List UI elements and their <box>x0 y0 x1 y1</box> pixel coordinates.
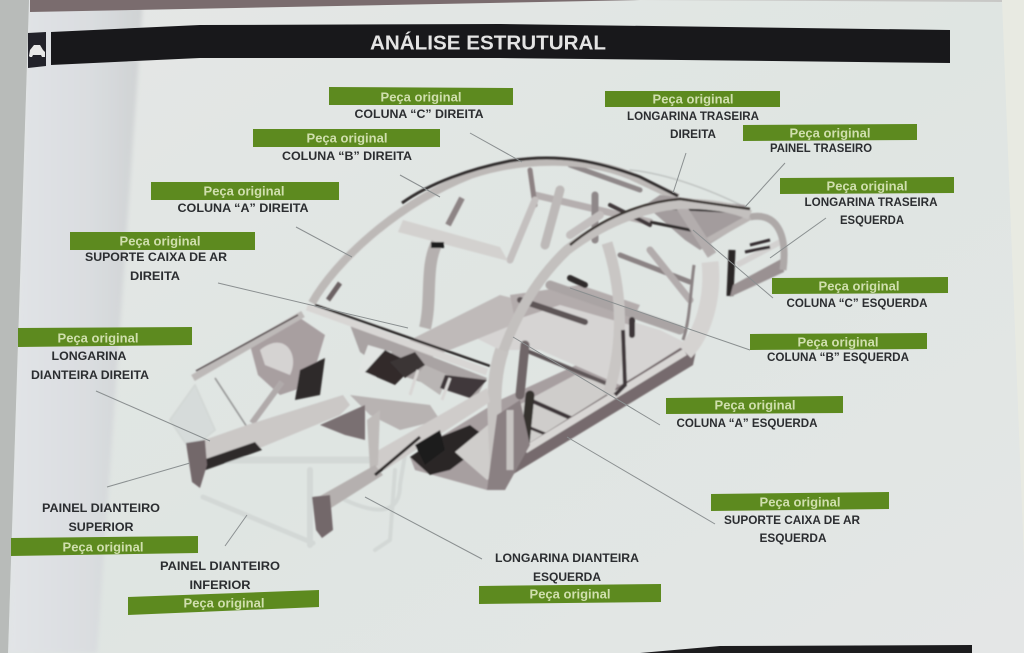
label: suporte caixa de ar direita: SUPORTE CAIXA DE AR <box>85 250 227 264</box>
label: coluna C esquerda: Peça original <box>819 278 899 293</box>
label: longarina dianteira direita <box>18 327 192 382</box>
label: coluna B direita <box>253 129 440 163</box>
label: coluna C esquerda <box>772 277 948 310</box>
label: longarina dianteira esquerda: LONGARINA DIANTEIRA <box>495 551 639 565</box>
label: suporte caixa de ar esquerda: ESQUERDA <box>760 531 827 545</box>
label: longarina traseira direita: Peça original <box>653 91 733 106</box>
label: longarina dianteira direita: LONGARINA <box>52 349 127 363</box>
far roof rail and A pillar <box>312 162 678 303</box>
header icon: car <box>28 32 46 68</box>
label: suporte caixa de ar esquerda <box>711 492 889 545</box>
near roof arc and A pillar <box>493 204 750 383</box>
label: suporte caixa de ar esquerda: Peça original <box>760 494 840 509</box>
label: coluna C direita: Peça original <box>381 89 461 104</box>
label: longarina traseira direita: DIREITA <box>670 127 716 141</box>
title bar: ANÁLISE ESTRUTURAL <box>370 31 606 54</box>
leader lines <box>96 133 826 559</box>
label: longarina dianteira esquerda: ESQUERDA <box>533 570 601 584</box>
right front longeron <box>190 395 350 468</box>
label: coluna A esquerda <box>666 396 843 430</box>
label: coluna C direita: COLUNA “C” DIREITA <box>354 107 484 121</box>
label: painel dianteiro inferior: INFERIOR <box>190 578 251 592</box>
near trunk and rear <box>645 195 752 250</box>
far strut tower <box>250 318 325 395</box>
label: painel dianteiro superior <box>11 501 198 556</box>
ghost front parts <box>170 170 747 550</box>
label: painel dianteiro superior: PAINEL DIANTEIRO <box>42 501 160 515</box>
label: painel dianteiro inferior: PAINEL DIANTEIRO <box>160 559 280 573</box>
label: suporte caixa de ar direita: DIREITA <box>130 269 180 283</box>
sill <box>487 346 697 490</box>
label: painel dianteiro inferior: Peça original <box>184 595 264 610</box>
title bar <box>51 24 950 65</box>
label: coluna B esquerda: Peça original <box>798 334 878 349</box>
label: longarina traseira esquerda: LONGARINA TRASEIRA <box>804 195 938 209</box>
label: longarina traseira direita: LONGARINA TRASEIRA <box>627 109 759 123</box>
label: coluna B esquerda <box>750 333 927 364</box>
label: coluna C direita <box>329 87 513 121</box>
label: coluna A esquerda: Peça original <box>715 397 795 412</box>
label: coluna B esquerda: COLUNA “B” ESQUERDA <box>767 350 909 364</box>
cowl and front bay <box>350 325 487 400</box>
label: longarina dianteira esquerda <box>479 551 661 604</box>
label: coluna A direita <box>151 182 339 215</box>
label: painel dianteiro inferior <box>128 559 319 615</box>
label: painel dianteiro superior: SUPERIOR <box>68 520 134 534</box>
label: longarina dianteira direita: Peça original <box>58 330 138 345</box>
label: longarina dianteira esquerda: Peça original <box>530 586 610 601</box>
label: suporte caixa de ar direita <box>70 232 255 283</box>
label: longarina traseira esquerda: ESQUERDA <box>840 213 904 227</box>
label: painel traseiro: PAINEL TRASEIRO <box>770 141 872 155</box>
near front apron and left longeron <box>370 388 490 470</box>
label: coluna C esquerda: COLUNA “C” ESQUERDA <box>786 296 928 310</box>
label: suporte caixa de ar direita: Peça original <box>120 233 200 248</box>
car body structure illustration <box>170 158 784 550</box>
floor and dark undercarriage <box>410 345 693 490</box>
label: coluna A direita: Peça original <box>204 183 284 198</box>
C pillar near <box>685 262 711 352</box>
label: painel dianteiro superior: Peça original <box>63 539 143 554</box>
rear cross members <box>510 165 690 445</box>
label: coluna B direita: Peça original <box>307 130 387 145</box>
label: painel traseiro: Peça original <box>790 125 870 140</box>
label: coluna B direita: COLUNA “B” DIREITA <box>282 149 412 163</box>
label: longarina traseira esquerda: Peça original <box>827 178 907 193</box>
far B pillar <box>425 243 437 328</box>
label: coluna A esquerda: COLUNA “A” ESQUERDA <box>676 416 818 430</box>
label: painel traseiro <box>743 124 917 155</box>
label: coluna A direita: COLUNA “A” DIREITA <box>178 201 309 215</box>
label: suporte caixa de ar esquerda: SUPORTE CAIXA DE AR <box>724 513 860 527</box>
label: longarina traseira direita <box>605 91 780 141</box>
B pillar near <box>607 243 620 395</box>
roof header <box>398 220 508 261</box>
label: longarina traseira esquerda <box>780 177 954 227</box>
label: longarina dianteira direita: DIANTEIRA DIREITA <box>31 368 149 382</box>
